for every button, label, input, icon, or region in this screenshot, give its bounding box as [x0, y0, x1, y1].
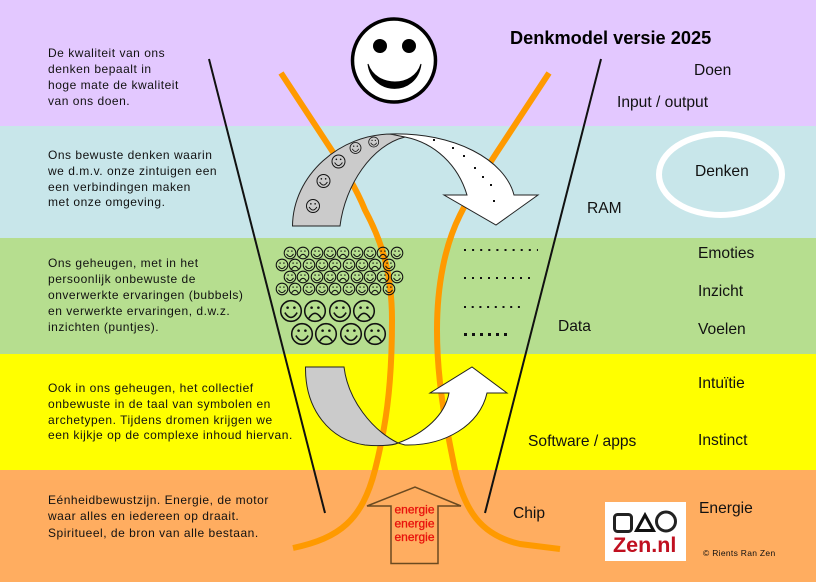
smileys on grey arc [306, 137, 379, 212]
text: denken: Ons bewuste denken waarin [48, 148, 212, 162]
text: energie: energie [394, 530, 435, 544]
text: energie: energie [394, 516, 435, 530]
right labels: Energie [699, 500, 753, 517]
right labels: Emoties [698, 245, 755, 262]
text: geheugen [48, 256, 243, 334]
text: collectief onbewuste: archetypen. Tijdens dromen krijgen we [48, 413, 273, 427]
text: geheugen: persoonlijk onbewuste de [48, 272, 196, 286]
text: eenheidbewustzijn: waar alles en iedereen op draait. [47, 509, 239, 523]
text: energie [394, 502, 435, 544]
text: denken: met onze omgeving. [48, 195, 165, 209]
right labels: Inzicht [698, 283, 744, 300]
right labels: Software / apps [528, 433, 637, 450]
right labels: RAM [587, 200, 622, 217]
orange curve: right [437, 73, 560, 549]
arrow: white curve with head [398, 367, 507, 445]
orange curve: left [281, 73, 392, 548]
band: denken (light blue) [0, 126, 816, 238]
text: collectief onbewuste: Ook in ons geheugen, het collectief [48, 381, 254, 395]
text: eenheidbewustzijn: Eénheidbewustzijn. Energie, de motor [48, 493, 269, 507]
smiley: large [352, 19, 436, 102]
right labels: Data [558, 318, 591, 335]
funnel line: right [485, 59, 601, 513]
arrow: grey curve in yellow band [305, 367, 398, 446]
text: collectief onbewuste [48, 381, 293, 442]
logo: Zen.nl: Zen.nl [613, 533, 676, 557]
dotted rows: insights [464, 250, 538, 334]
text: doen: hoge mate de kwaliteit [48, 78, 179, 92]
band: geheugen (green) [0, 238, 816, 354]
text: doen: van ons doen. [48, 94, 130, 108]
credit: © Rients Ran Zen [703, 548, 775, 558]
band: doen (purple) [0, 0, 816, 126]
text: doen [48, 46, 179, 108]
text: collectief onbewuste: een kijkje op de complexe inhoud hiervan. [48, 428, 293, 442]
logo: Zen.nl [605, 502, 686, 561]
arrow: grey arc over denken [292, 134, 405, 226]
text: denken [47, 148, 217, 209]
arrow: energie [367, 487, 461, 564]
right labels: Voelen [698, 321, 746, 338]
funnel line: left [209, 59, 325, 513]
right labels: Denken [695, 163, 749, 180]
text: energie: energie [394, 502, 435, 516]
text: eenheidbewustzijn: Spiritueel, de bron van alle bestaan. [48, 526, 259, 540]
right labels: Input / output [617, 94, 709, 111]
right labels: Doen [694, 62, 731, 79]
large bubbles: emotions [281, 301, 385, 344]
text: geheugen: onverwerkte ervaringen (bubbels) [48, 288, 243, 302]
text: doen: De kwaliteit van ons [48, 46, 165, 60]
right labels: Intuïtie [698, 375, 745, 392]
text: collectief onbewuste: onbewuste in de taal van symbolen en [48, 397, 271, 411]
text: eenheidbewustzijn [47, 493, 269, 540]
band: energie (orange) [0, 470, 816, 582]
dots on white arc [433, 139, 495, 202]
band: collectief onbewuste (yellow) [0, 354, 816, 470]
arrow: white arc with head [390, 134, 538, 225]
text: denken: we d.m.v. onze zintuigen een [47, 164, 217, 178]
text: geheugen: inzichten (puntjes). [48, 320, 159, 334]
title: Denkmodel versie 2025 [510, 28, 711, 48]
text: denken: een verbindingen maken [48, 180, 191, 194]
right labels [513, 62, 755, 522]
right labels: Chip [513, 505, 545, 522]
text: geheugen: Ons geheugen, met in het [48, 256, 199, 270]
text: geheugen: en verwerkte ervaringen, d.w.z. [48, 304, 230, 318]
text: doen: denken bepaalt in [48, 62, 152, 76]
small bubbles: emotions [276, 247, 403, 295]
ellipse: denken [659, 134, 782, 215]
right labels: Instinct [698, 432, 748, 449]
